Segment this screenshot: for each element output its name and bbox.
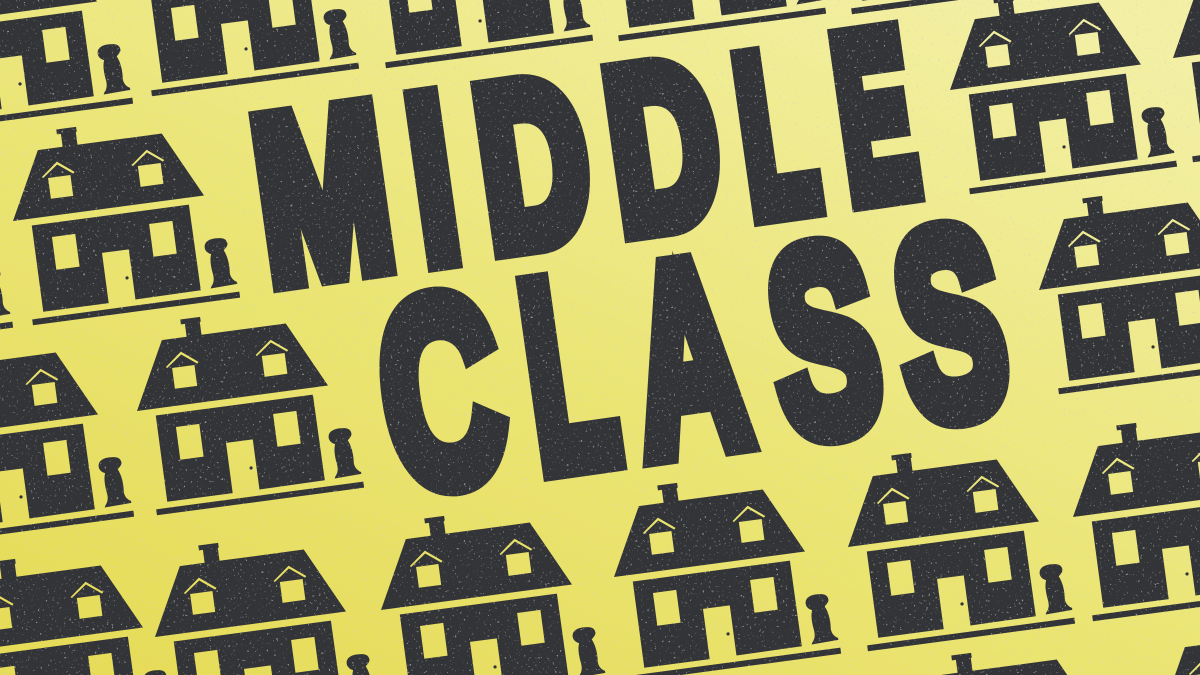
house row 1: far left edge: [0, 138, 13, 356]
house: middle left: [126, 298, 364, 516]
title word: CLASS: C: [362, 237, 520, 546]
house: top row fifth: [821, 0, 1059, 15]
house: bottom row fourth: [837, 434, 1075, 652]
house: upper right edge: [1162, 0, 1200, 163]
title word: MIDDLE: D: [462, 30, 605, 299]
house: bottom left edge: [0, 540, 179, 675]
title word: CLASS: A: [613, 203, 762, 512]
title word: MIDDLE: M: [240, 57, 406, 332]
house: top row left: [0, 0, 133, 132]
house: bottom row second: [370, 497, 608, 675]
house: top row third: [355, 0, 593, 69]
title word: CLASS: S: [752, 187, 896, 494]
title word: CLASS: S: [878, 170, 1022, 477]
title word: CLASS: L: [506, 220, 631, 526]
house: bottom row fifth: [1062, 404, 1200, 622]
house: row 1 left: [2, 108, 240, 326]
title word: MIDDLE: L: [723, 4, 829, 262]
house: bottom edge, chimney only: [897, 634, 1135, 675]
title word: CLASS: [362, 170, 1022, 546]
title word: MIDDLE: I: [395, 48, 471, 312]
title word: MIDDLE: D: [592, 13, 735, 281]
house: top row second: [121, 0, 359, 97]
house: middle left edge: [0, 327, 134, 545]
house: bottom row third: [603, 464, 841, 675]
house: bottom row first: [144, 524, 382, 675]
house: top row fourth: [588, 0, 826, 42]
house: upper right: [939, 0, 1177, 195]
house: bottom right corner: [1149, 605, 1200, 675]
title word: MIDDLE: [240, 0, 929, 332]
house: middle right: [1028, 177, 1200, 395]
